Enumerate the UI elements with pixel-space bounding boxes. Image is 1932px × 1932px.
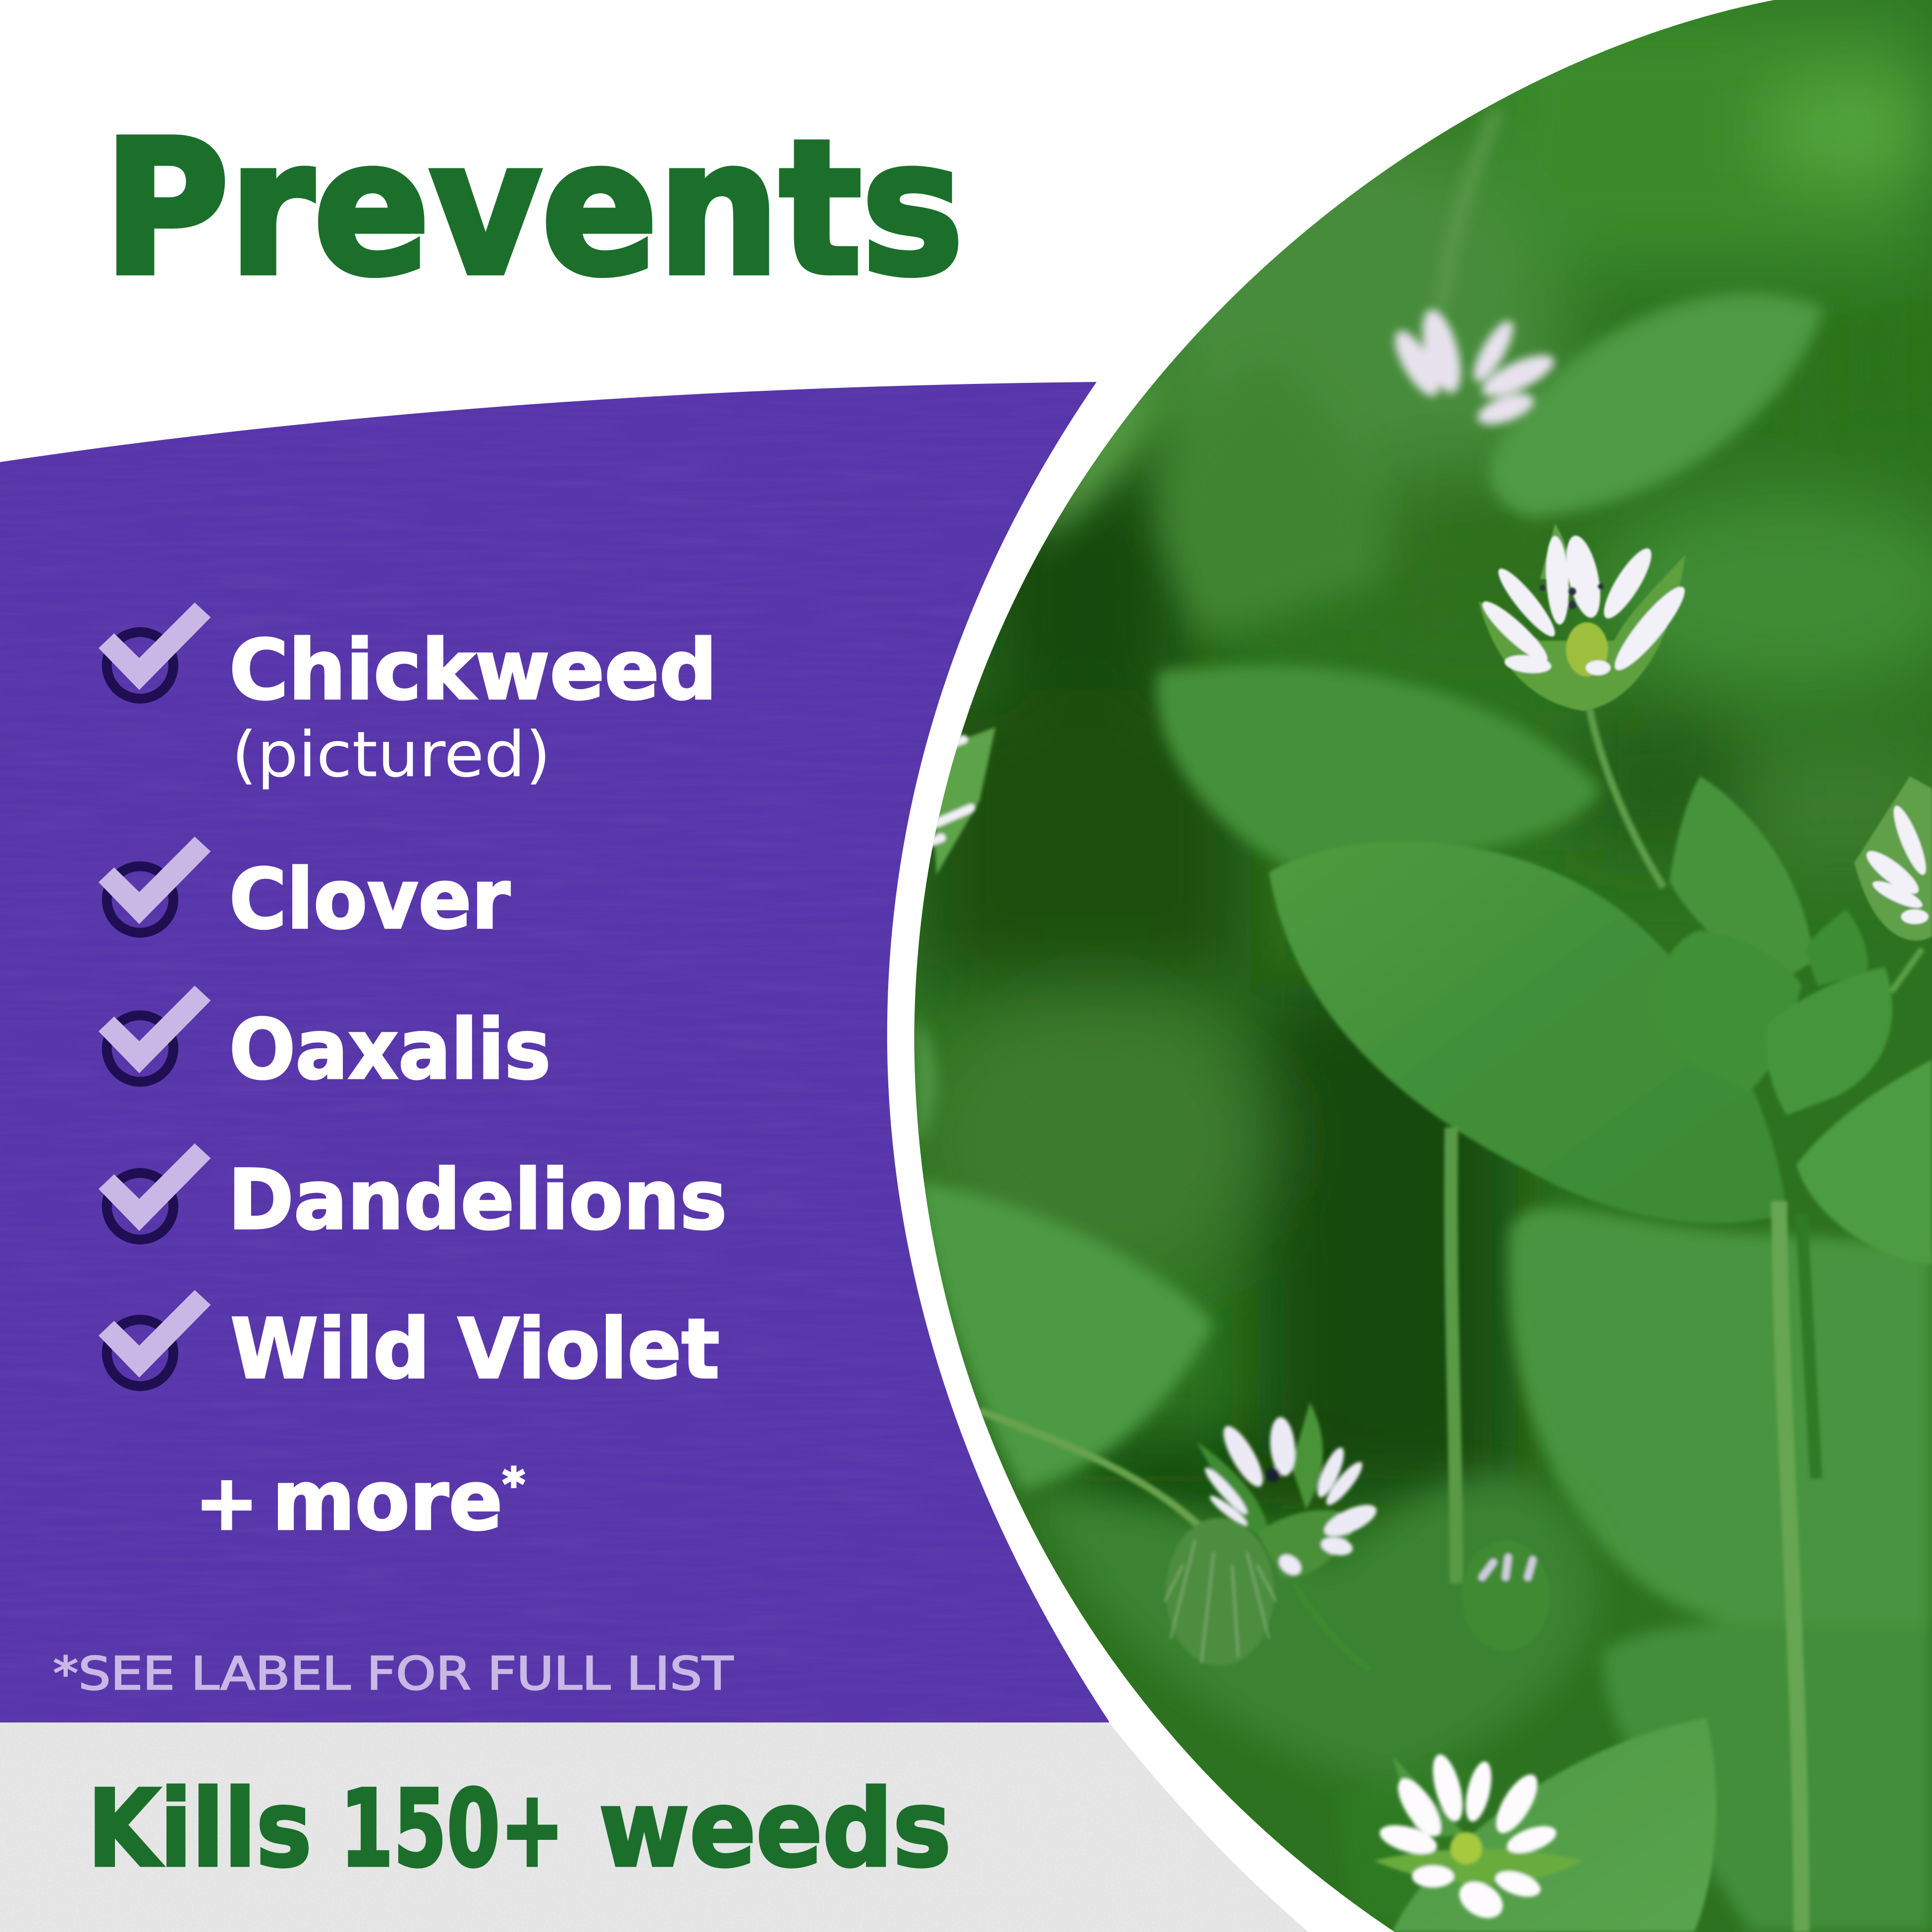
footer heading	[88, 1768, 951, 1891]
blurred leaves	[914, 293, 1932, 1932]
list item: Clover	[99, 837, 510, 948]
bottom leaf	[1393, 1717, 1716, 1932]
flower: main open flower	[1477, 524, 1693, 711]
large central leaf	[1269, 842, 1787, 1223]
title: Prevents	[104, 101, 964, 316]
panel: purple weed list	[0, 370, 1121, 1725]
list item: Chickweed: (pictured)	[232, 718, 551, 791]
icon: check	[99, 1290, 211, 1386]
blurred flower, top	[1387, 305, 1559, 431]
list item: Oaxalis: Oaxalis	[229, 1002, 551, 1098]
blurred background foliage	[918, 0, 1932, 1503]
photo: chickweed plant	[862, 0, 1932, 1932]
panel: grey footer band	[0, 1722, 1318, 1932]
list item: Oaxalis	[99, 986, 551, 1098]
footer heading: Kills	[88, 1768, 312, 1891]
stems	[1590, 708, 1664, 887]
list item: Chickweed	[99, 602, 717, 791]
icon: check	[99, 602, 211, 698]
panel background	[0, 382, 1109, 1722]
flower: bottom	[1374, 1751, 1583, 1926]
icon: check	[99, 986, 211, 1082]
list item: + more: +	[195, 1459, 259, 1548]
flower: left partial	[929, 727, 996, 875]
hairy bud	[1164, 1518, 1277, 1666]
list item: Clover: Clover	[229, 852, 510, 948]
list item: Wild Violet: Wild Violet	[230, 1301, 720, 1397]
sharp foreground leaves	[979, 708, 1932, 1932]
list item: + more: more	[272, 1453, 512, 1549]
leaf cluster	[1669, 776, 1814, 986]
footnote: *SEE LABEL FOR FULL LIST	[53, 1647, 734, 1700]
icon: check	[99, 837, 211, 933]
footer heading: weeds	[599, 1768, 951, 1891]
list item: Chickweed: Chickweed	[229, 622, 717, 718]
list item: + more: *	[503, 1459, 525, 1510]
flower: right edge	[1854, 776, 1932, 941]
icon: check	[99, 1143, 211, 1239]
list item: Dandelions: Dandelions	[228, 1152, 727, 1248]
list item: Wild Violet	[99, 1290, 720, 1397]
flower: lower left	[1196, 1402, 1381, 1579]
small bud, centre	[1461, 1540, 1550, 1651]
footer heading: 150+	[340, 1768, 564, 1891]
